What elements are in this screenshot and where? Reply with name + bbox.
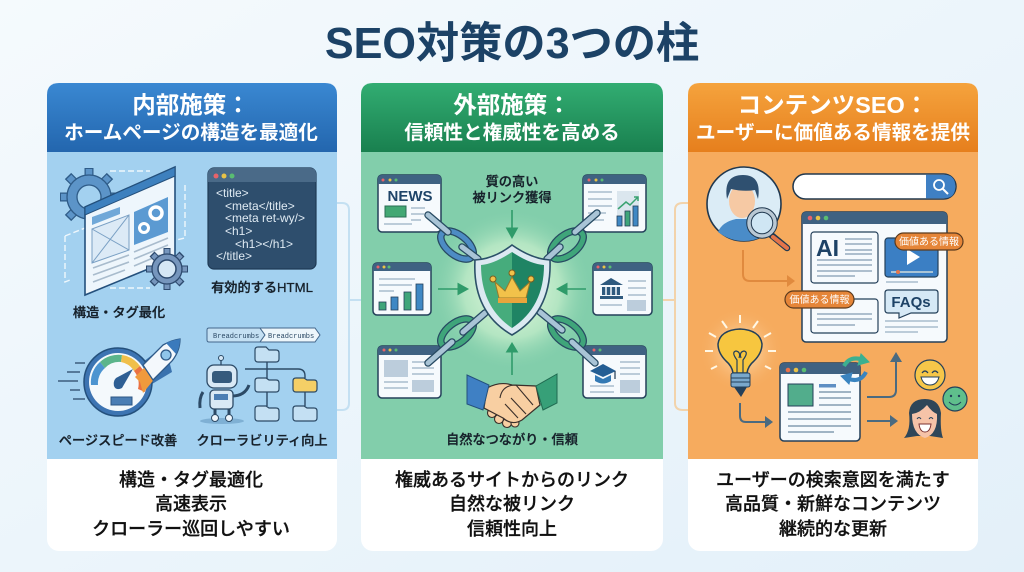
- card: FAQs: [885, 290, 938, 332]
- chain: top left: [428, 215, 478, 265]
- summary text: 継続的な更新: [779, 519, 887, 539]
- heading: コンテンツSEO：: [738, 92, 928, 118]
- icon: folder tree: [245, 347, 317, 421]
- heading: 内部施策：: [132, 92, 250, 118]
- panel: external measures: [361, 83, 663, 551]
- arrow: left: [557, 284, 586, 294]
- icon: happy woman: [904, 399, 943, 438]
- icon: crawler robot: [200, 356, 249, 424]
- summary text: 高品質・新鮮なコンテンツ: [725, 494, 941, 514]
- subheading: ユーザーに価値ある情報を提供: [696, 122, 970, 144]
- heading: 外部施策：: [453, 92, 571, 118]
- chain: bottom right: [540, 312, 595, 363]
- panel body green: [361, 150, 663, 459]
- card: AI: AI: [816, 235, 839, 261]
- icon: code editor: <title>: [216, 186, 249, 200]
- card: FAQs: FAQs: [891, 294, 931, 311]
- window: news: NEWS: [388, 188, 432, 205]
- icon: breadcrumbs: [207, 328, 320, 342]
- window: article: [378, 346, 441, 398]
- icon: code editor: <meta ret-wy/>: [225, 211, 305, 225]
- arrow: page to user: [867, 415, 898, 427]
- summary text: ユーザーの検索意図を満たす: [716, 470, 950, 490]
- icon: yellow smiley: [915, 360, 945, 390]
- icon: code editor: [208, 168, 316, 269]
- icon: green smiley: [943, 387, 967, 411]
- badge: valuable info right: 価値ある情報: [899, 235, 959, 248]
- summary text: 自然な被リンク: [449, 493, 575, 514]
- icon: refresh: [841, 354, 869, 384]
- arrow: bulb to page: [740, 403, 773, 428]
- subheading: ホームページの構造を最適化: [64, 122, 318, 144]
- window: growth chart: [583, 175, 646, 232]
- card: lower article: [811, 299, 878, 333]
- badge: valuable info right: [895, 233, 963, 250]
- icon: user with magnifier: [707, 167, 787, 248]
- icon: handshake: [467, 374, 557, 428]
- icon: code editor: <meta</title>: [225, 199, 295, 213]
- summary text: クローラー巡回しやすい: [92, 519, 290, 539]
- title: SEO対策の3つの柱: [325, 20, 699, 68]
- arrow: user to content: [743, 250, 795, 287]
- summary text: [716, 470, 950, 539]
- icon: breadcrumbs: Breadcrumbs: [268, 333, 314, 341]
- header orange: [688, 83, 978, 152]
- panel: content SEO: [688, 83, 978, 551]
- window: updated page: [780, 363, 860, 441]
- crown: [495, 277, 530, 298]
- arrow: right: [438, 284, 468, 294]
- caption: 被リンク獲得: [472, 190, 552, 205]
- window: news: [378, 175, 441, 232]
- caption: クローラビリティ向上: [196, 433, 328, 448]
- icon: speed gauge and rocket: [58, 339, 180, 416]
- summary text: 構造・タグ最適化: [119, 470, 263, 490]
- icon: code editor: <h1></h1>: [235, 237, 293, 251]
- caption: [472, 173, 552, 205]
- header green: [361, 83, 663, 152]
- content window: [802, 212, 947, 342]
- panel: internal measures: [47, 83, 337, 551]
- arrow: down: [506, 210, 518, 238]
- connector: middle to right: [663, 203, 688, 410]
- chain: bottom left: [428, 313, 485, 363]
- chains: [428, 213, 597, 363]
- arrow: up: [506, 343, 518, 375]
- panel body blue: [47, 150, 337, 459]
- summary text: 権威あるサイトからのリンク: [395, 470, 629, 490]
- header blue: [47, 83, 337, 152]
- badge: valuable info left: 価値ある情報: [790, 293, 850, 306]
- card: AI: [811, 232, 878, 283]
- summary text: 信頼性向上: [467, 519, 557, 539]
- window: institution: [593, 263, 652, 315]
- glow: [432, 210, 592, 370]
- icon: browser wireframe with gears: [60, 167, 188, 295]
- caption: 有効的するHTML: [211, 280, 313, 295]
- caption: 構造・タグ最化: [73, 304, 165, 320]
- search bar: [793, 174, 956, 199]
- icon: light bulb: [699, 308, 783, 397]
- caption: 自然なつながり・信頼: [446, 431, 578, 447]
- caption: ページスピード改善: [59, 432, 177, 448]
- caption: 質の高い: [486, 173, 538, 189]
- summary text: [92, 470, 290, 539]
- icon: code editor: <h1>: [225, 224, 252, 238]
- badge: valuable info left: [785, 291, 854, 308]
- window: education: [583, 346, 646, 398]
- panel body orange: [688, 150, 978, 459]
- icon: shield with crown: [475, 245, 550, 335]
- arrow: page up: [867, 352, 902, 397]
- summary text: 高速表示: [155, 494, 227, 514]
- connector: left to middle: [337, 203, 361, 410]
- icon: breadcrumbs: Breadcrumbs: [213, 333, 259, 341]
- chain: top right: [546, 213, 597, 265]
- card: video: [885, 238, 938, 282]
- icon: code editor: </title>: [216, 249, 252, 263]
- window: bar chart: [373, 263, 431, 315]
- summary text: [395, 470, 629, 539]
- subheading: 信頼性と権威性を高める: [404, 121, 620, 144]
